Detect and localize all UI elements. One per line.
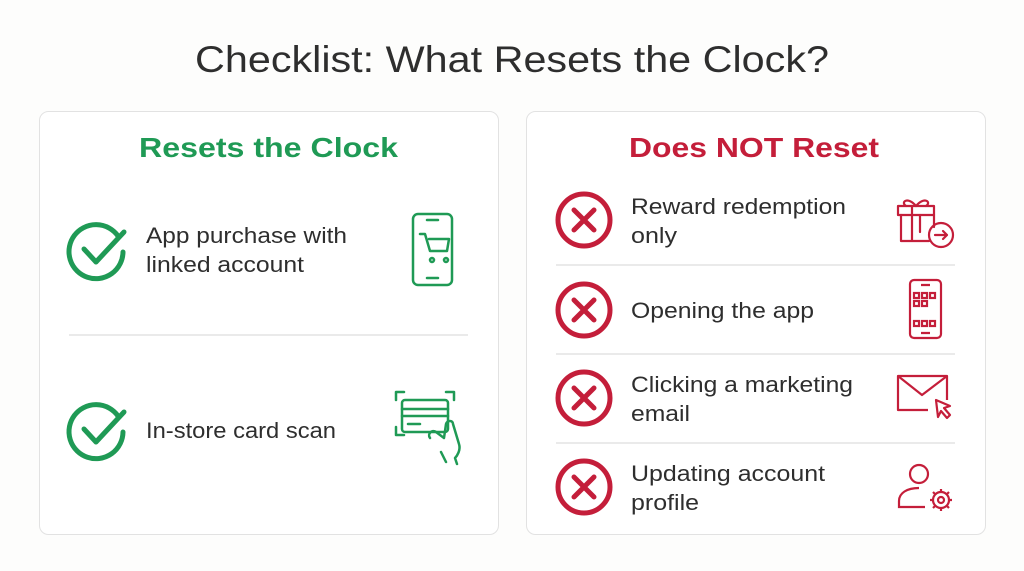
icon: check xyxy=(69,225,124,279)
icon: x xyxy=(558,284,610,336)
item: marketing email: Clicking a marketing xyxy=(631,372,853,397)
icon: x xyxy=(558,372,610,424)
panel: resets the clock xyxy=(40,112,498,534)
icon: x xyxy=(558,461,610,513)
icon: check xyxy=(69,405,124,459)
item: opening the app xyxy=(558,280,941,338)
title: Checklist: What Resets the Clock? xyxy=(195,39,829,80)
item: reward redemption: only xyxy=(631,223,677,248)
item: in-store card scan: In-store card scan xyxy=(146,418,336,443)
item: app purchase: linked account xyxy=(146,252,304,277)
item: reward redemption: Reward redemption xyxy=(631,194,846,219)
item: app purchase xyxy=(69,214,452,285)
item: opening the app: Opening the app xyxy=(631,298,814,323)
icon: phone cart xyxy=(413,214,452,285)
icon: envelope cursor xyxy=(898,376,950,418)
panel: does not reset xyxy=(526,112,986,534)
icon: gift xyxy=(898,201,953,247)
heading: resets: Resets the Clock xyxy=(139,132,398,163)
heading: does not reset: Does NOT Reset xyxy=(629,132,879,163)
item: marketing email xyxy=(558,372,950,426)
item: updating profile xyxy=(558,461,952,515)
item: app purchase: App purchase with xyxy=(146,223,347,248)
icon: user gear xyxy=(899,465,952,511)
item: marketing email: email xyxy=(631,401,690,426)
icon: card hand xyxy=(396,392,460,464)
icon: phone apps xyxy=(910,280,941,338)
item: updating profile: Updating account xyxy=(631,461,825,486)
icon: x xyxy=(558,194,610,246)
item: reward redemption xyxy=(558,194,953,248)
item: updating profile: profile xyxy=(631,490,699,515)
item: in-store card scan xyxy=(69,392,460,464)
